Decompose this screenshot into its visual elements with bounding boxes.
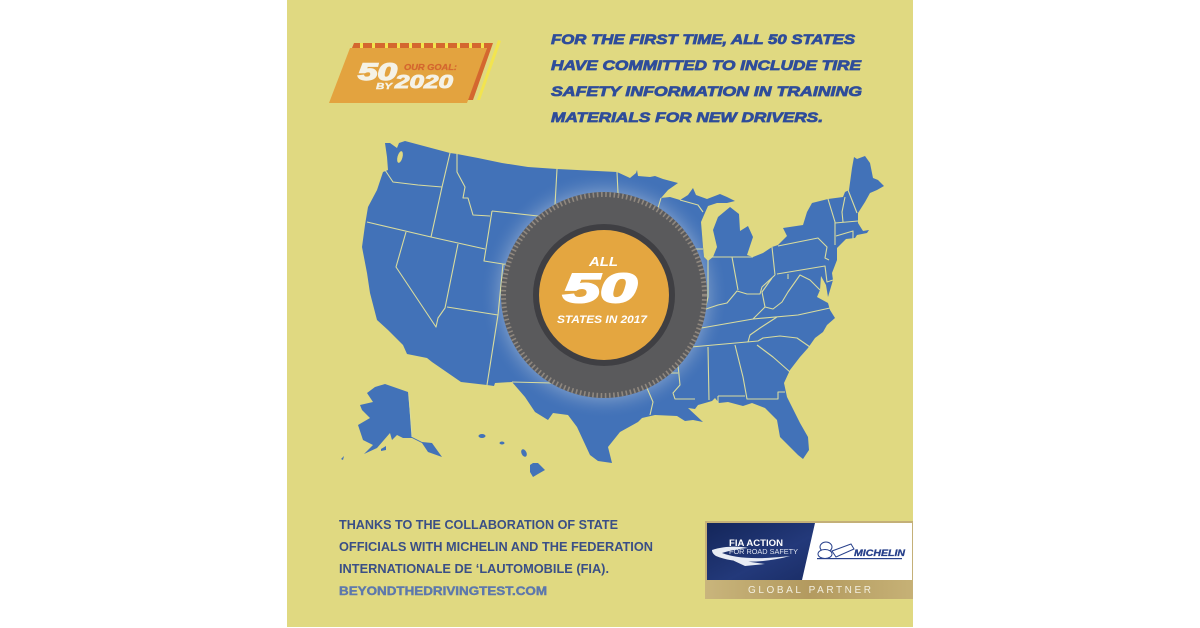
badge: 50 by 2020 goal: BY <box>376 81 394 91</box>
heading text: SAFETY INFORMATION IN TRAINING <box>551 83 862 99</box>
map: United States <box>341 141 884 477</box>
yellow background panel <box>287 0 913 627</box>
michelin underline <box>817 558 902 559</box>
bottom thanks text: THANKS TO THE COLLABORATION OF STATE <box>339 517 618 532</box>
hawaii <box>478 434 545 477</box>
road safety text: FOR ROAD SAFETY <box>729 547 798 556</box>
michelin white panel <box>800 523 912 580</box>
fia swoosh <box>712 547 790 566</box>
tire: all 50 states in 2017: ALL <box>588 254 618 269</box>
contiguous states landmass <box>362 141 884 463</box>
alaska border <box>409 395 412 437</box>
state borders <box>367 153 858 415</box>
partner logo block <box>705 521 913 599</box>
global partner strip <box>705 580 913 599</box>
tire: all 50 states in 2017: 50 <box>563 265 637 311</box>
bottom thanks text: OFFICIALS WITH MICHELIN AND THE FEDERATION <box>339 539 653 554</box>
tire: all 50 states in 2017 <box>501 192 707 398</box>
tire: all 50 states in 2017: STATES IN 2017 <box>557 314 648 326</box>
badge: 50 by 2020 goal <box>329 40 501 103</box>
infographic canvas <box>287 0 913 627</box>
michelin wordmark: MICHELIN <box>854 548 906 559</box>
tire glow on map <box>490 180 718 410</box>
website link: BEYONDTHEDRIVINGTEST.COM <box>339 586 547 598</box>
badge: 50 by 2020 goal: OUR GOAL: <box>404 63 457 72</box>
puget sound <box>396 151 404 163</box>
bottom thanks text: INTERNATIONALE DE ‘LAUTOMOBILE (FIA). <box>339 561 609 576</box>
badge: 50 by 2020 goal: 50 <box>358 59 398 86</box>
badge: 50 by 2020 goal: 2020 <box>394 72 453 92</box>
fia navy panel <box>707 523 815 580</box>
alaska <box>358 384 442 457</box>
bottom thanks text <box>339 517 653 576</box>
alaska islands <box>341 446 386 460</box>
logo frame <box>705 521 913 599</box>
heading text: HAVE COMMITTED TO INCLUDE TIRE <box>551 57 862 73</box>
fia action text: FIA ACTION <box>729 538 783 549</box>
heading text <box>551 31 862 125</box>
heading text: MATERIALS FOR NEW DRIVERS. <box>551 109 823 125</box>
global partner text: GLOBAL PARTNER <box>748 585 871 596</box>
heading text: FOR THE FIRST TIME, ALL 50 STATES <box>551 31 856 47</box>
icon: michelin man <box>818 542 854 558</box>
